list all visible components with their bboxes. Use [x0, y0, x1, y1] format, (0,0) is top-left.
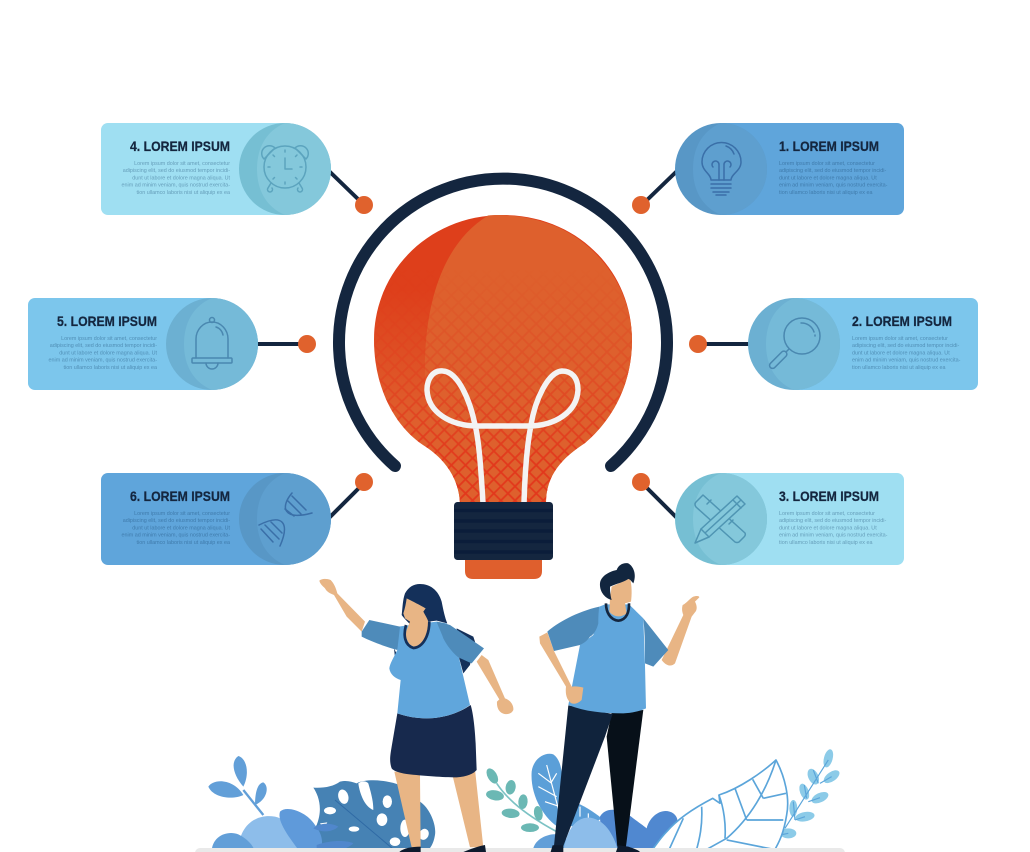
heading: 2. LOREM IPSUM — [852, 313, 952, 329]
body text: adipiscing elit, sed do eiusmod tempor incidi- — [50, 343, 157, 349]
icon: light bulb — [702, 142, 741, 195]
bulb glass — [374, 215, 632, 503]
body text: Lorem ipsum dolor sit amet, consectetur — [134, 511, 230, 517]
left sleeve — [362, 620, 400, 650]
panel 4 — [101, 123, 331, 215]
icon: magnifier — [768, 318, 820, 370]
heading: 5. LOREM IPSUM — [57, 313, 157, 329]
bulb lattice pattern — [374, 313, 632, 502]
filament — [427, 371, 578, 503]
shirt — [568, 604, 646, 713]
body text: dunt ut labore et dolore magna aliqua. Ut — [132, 175, 230, 181]
body text: Lorem ipsum dolor sit amet, consectetur — [134, 161, 230, 167]
connector 6 — [329, 473, 373, 518]
icon: DNA helix — [259, 493, 312, 546]
ring around bulb — [339, 179, 667, 466]
body text — [122, 161, 230, 196]
body text: tion ullamco laboris nisi ut aliquip ex ea — [136, 190, 230, 196]
legs and shoes — [551, 705, 643, 852]
left arm — [319, 579, 365, 632]
heading: 3. LOREM IPSUM — [779, 488, 879, 504]
body text: enim ad minim veniam, quis nostrud exercita- — [122, 183, 230, 189]
body text: enim ad minim veniam, quis nostrud exercita- — [779, 183, 888, 189]
neckline — [405, 622, 429, 648]
body text: enim ad minim veniam, quis nostrud exercita- — [779, 533, 888, 539]
plant: teal sprig — [484, 766, 557, 832]
body text: tion ullamco laboris nisi ut aliquip ex ea — [136, 540, 230, 546]
body text: adipiscing elit, sed do eiusmod tempor incidi- — [779, 518, 886, 524]
heading: 6. LOREM IPSUM — [130, 488, 230, 504]
left sleeve — [547, 607, 599, 651]
heading: 1. LOREM IPSUM — [779, 138, 879, 154]
hair — [402, 584, 447, 625]
panel 2 — [748, 298, 978, 390]
connector 2 — [689, 335, 750, 353]
body text — [852, 336, 961, 371]
body text: enim ad minim veniam, quis nostrud exercita- — [122, 533, 230, 539]
right sprig — [780, 748, 842, 838]
body text: Lorem ipsum dolor sit amet, consectetur — [779, 161, 875, 167]
legs and shoes — [394, 769, 486, 852]
connector 5 — [256, 335, 316, 353]
body text — [779, 511, 888, 546]
body text: dunt ut labore et dolore magna aliqua. Ut — [852, 350, 950, 356]
plant: middle leaf and bushes — [532, 748, 842, 852]
body text: adipiscing elit, sed do eiusmod tempor incidi- — [852, 343, 959, 349]
left bush — [533, 834, 577, 852]
mid bush — [279, 809, 322, 852]
body text: dunt ut labore et dolore magna aliqua. Ut — [59, 350, 157, 356]
connector 1 — [632, 171, 677, 214]
sprig — [208, 756, 267, 815]
bulb highlight — [425, 215, 632, 503]
blue leaf — [532, 754, 602, 828]
body text: adipiscing elit, sed do eiusmod tempor incidi- — [123, 518, 230, 524]
connector 3 — [632, 473, 677, 518]
right arm — [662, 596, 699, 666]
face and neck — [403, 598, 428, 647]
body text — [122, 511, 230, 546]
hair back — [394, 628, 475, 673]
body text: adipiscing elit, sed do eiusmod tempor incidi- — [123, 168, 230, 174]
body text: tion ullamco laboris nisi ut aliquip ex ea — [779, 190, 872, 196]
body text — [49, 336, 157, 371]
shirt — [389, 622, 470, 718]
body text — [779, 161, 888, 196]
bulb tip — [465, 555, 542, 579]
collar — [606, 603, 629, 621]
person: man — [539, 563, 699, 852]
body text: Lorem ipsum dolor sit amet, consectetur — [779, 511, 875, 517]
body text: enim ad minim veniam, quis nostrud exercita- — [852, 358, 961, 364]
floor — [195, 848, 845, 852]
icon: bell — [192, 318, 232, 369]
right sleeve — [643, 618, 668, 667]
plant: left sprig and bushes — [208, 756, 435, 852]
panel 6 — [101, 473, 331, 565]
upper body — [319, 579, 513, 777]
person: woman — [319, 579, 513, 852]
icon: ruler and pencil — [695, 495, 745, 543]
body text: dunt ut labore et dolore magna aliqua. Ut — [132, 525, 230, 531]
skirt — [390, 705, 477, 777]
left bush — [212, 833, 255, 852]
right sleeve — [437, 622, 484, 663]
light bush — [238, 816, 303, 852]
body text: enim ad minim veniam, quis nostrud exercita- — [49, 358, 157, 364]
leaf tongues — [313, 824, 353, 852]
connector 4 — [329, 171, 373, 214]
body text: dunt ut labore et dolore magna aliqua. Ut — [779, 525, 877, 531]
hair — [600, 563, 635, 600]
upper body — [539, 563, 699, 713]
body text: Lorem ipsum dolor sit amet, consectetur — [852, 336, 948, 342]
heading: 4. LOREM IPSUM — [130, 138, 230, 154]
panel 3 — [675, 473, 904, 565]
right arm — [477, 655, 513, 714]
light bush — [563, 818, 618, 852]
outline leaf — [648, 760, 788, 852]
body text: Lorem ipsum dolor sit amet, consectetur — [61, 336, 157, 342]
body text: tion ullamco laboris nisi ut aliquip ex ea — [779, 540, 872, 546]
panel 5 — [28, 298, 258, 390]
left arm — [539, 632, 583, 704]
body text: tion ullamco laboris nisi ut aliquip ex ea — [852, 365, 946, 371]
panel 1 — [675, 123, 904, 215]
dark bush — [600, 810, 677, 852]
lightbulb — [374, 215, 632, 579]
body text: dunt ut labore et dolore magna aliqua. Ut — [779, 175, 877, 181]
body text: adipiscing elit, sed do eiusmod tempor incidi- — [779, 168, 886, 174]
monstera leaf — [313, 780, 435, 852]
icon: alarm clock — [262, 146, 308, 192]
neck and face — [609, 578, 632, 616]
bulb screw base — [454, 502, 553, 560]
body text: tion ullamco laboris nisi ut aliquip ex ea — [64, 365, 157, 371]
